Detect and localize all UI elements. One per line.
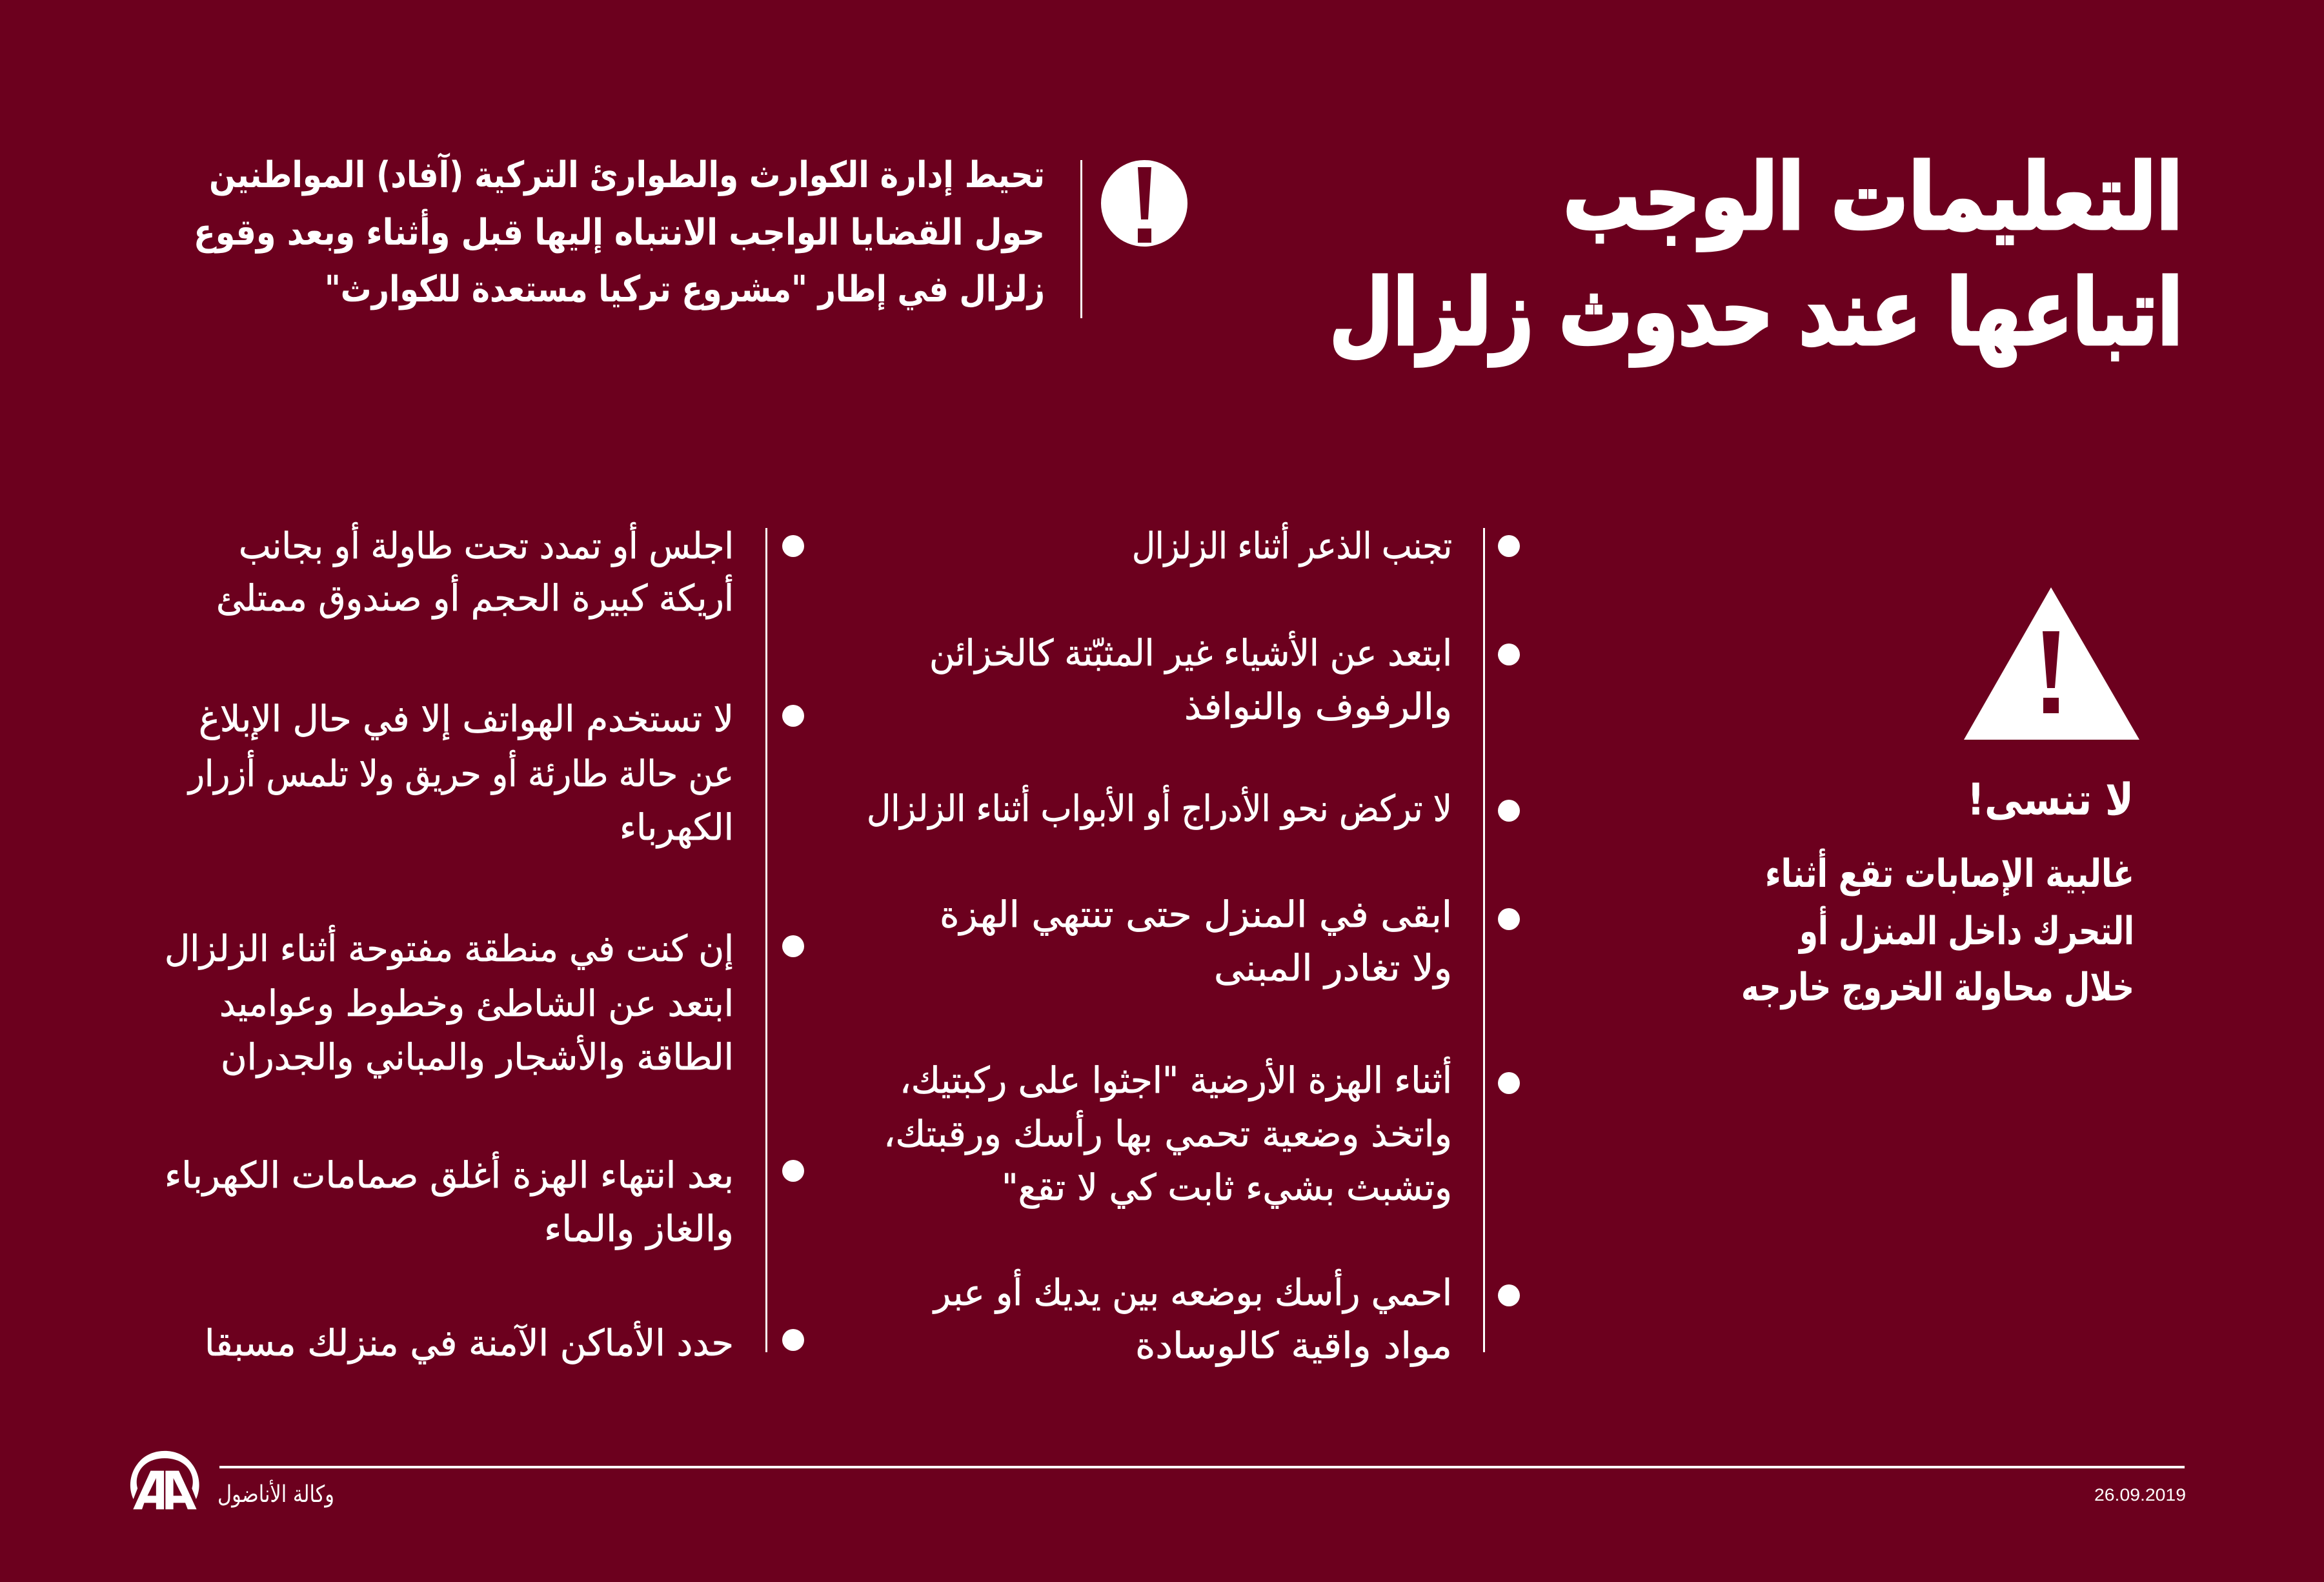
intro text: تحيط إدارة الكوارث والطوارئ التركية (آفاد) المواطنين — [209, 152, 1045, 196]
item: kneel — [884, 1057, 1520, 1209]
item: phones: لا تستخدم الهواتف إلا في حال الإبلاغ — [199, 698, 734, 741]
callout text: التحرك داخل المنزل أو — [1798, 906, 2134, 954]
title — [1329, 145, 2183, 367]
item: open area: الطاقة والأشجار والمباني والجدران — [221, 1035, 734, 1079]
footer date: 26.09.2019 — [2094, 1485, 2186, 1505]
item: protect head: احمي رأسك بوضعه بين يديك أو عبر — [932, 1269, 1452, 1314]
item: phones: عن حالة طارئة أو حريق ولا تلمس أزرار — [187, 750, 734, 795]
icon: exclamation circle — [1101, 160, 1187, 247]
panel: instructions left column — [165, 522, 804, 1364]
footer agency name: وكالة الأناضول — [217, 1479, 334, 1508]
item: sit under table — [216, 522, 804, 620]
callout text: غالبية الإصابات تقع أثناء — [1765, 848, 2134, 897]
title: التعليمات الوجب — [1563, 145, 2183, 251]
item: close valves: والغاز والماء — [544, 1208, 734, 1250]
item: stay away from objects — [929, 631, 1520, 728]
item: avoid panic: تجنب الذعر أثناء الزلزال — [1132, 522, 1452, 567]
item: open area: ابتعد عن الشاطئ وخطوط وعواميد — [219, 983, 734, 1025]
panel: instructions middle column — [867, 522, 1520, 1367]
intro text: حول القضايا الواجب الانتباه إليها قبل وأثناء وبعد وقوع — [194, 208, 1045, 254]
item: kneel: وتشبث بشيء ثابت كي لا تقع" — [1002, 1167, 1452, 1209]
item: protect head: مواد واقية كالوسادة — [1135, 1325, 1452, 1367]
footer logo — [130, 1451, 199, 1509]
callout heading: لا تنسى! — [1967, 775, 2134, 826]
item: stay away from objects: ابتعد عن الأشياء غير المثبّتة كالخزائن — [929, 631, 1452, 674]
intro text: زلزال في إطار "مشروع تركيا مستعدة للكوارث" — [325, 269, 1045, 310]
item: stay away from objects: والرفوف والنوافذ — [1184, 686, 1452, 728]
item: open area: إن كنت في منطقة مفتوحة أثناء الزلزال — [165, 925, 734, 971]
item: sit under table: اجلس أو تمدد تحت طاولة أو بجانب — [239, 522, 734, 567]
item: do not run: لا تركض نحو الأدراج أو الأبواب أثناء الزلزال — [867, 785, 1452, 830]
icon: warning triangle — [1964, 587, 2139, 740]
panel: do not forget — [1741, 587, 2139, 1010]
item: phones: الكهرباء — [620, 807, 734, 849]
item: close valves — [165, 1151, 804, 1250]
item: sit under table: أريكة كبيرة الحجم أو صندوق ممتلئ — [216, 574, 734, 620]
item: stay indoors — [940, 894, 1520, 989]
item: stay indoors: ابقى في المنزل حتى تنتهي الهزة — [940, 894, 1452, 936]
item: phones — [187, 698, 804, 849]
item: open area — [165, 925, 804, 1079]
intro text — [194, 152, 1045, 310]
item: safe places: حدد الأماكن الآمنة في منزلك مسبقا — [205, 1321, 734, 1364]
item: kneel: أثناء الهزة الأرضية "اجثوا على ركبتيك، — [900, 1057, 1452, 1102]
callout text: خلال محاولة الخروج خارجه — [1741, 965, 2134, 1010]
item: kneel: واتخذ وضعية تحمي بها رأسك ورقبتك، — [884, 1110, 1452, 1155]
item: stay indoors: ولا تغادر المبنى — [1214, 948, 1452, 989]
callout text — [1741, 848, 2134, 1010]
item: close valves: بعد انتهاء الهزة أغلق صمامات الكهرباء — [165, 1151, 734, 1197]
item: protect head — [932, 1269, 1520, 1367]
